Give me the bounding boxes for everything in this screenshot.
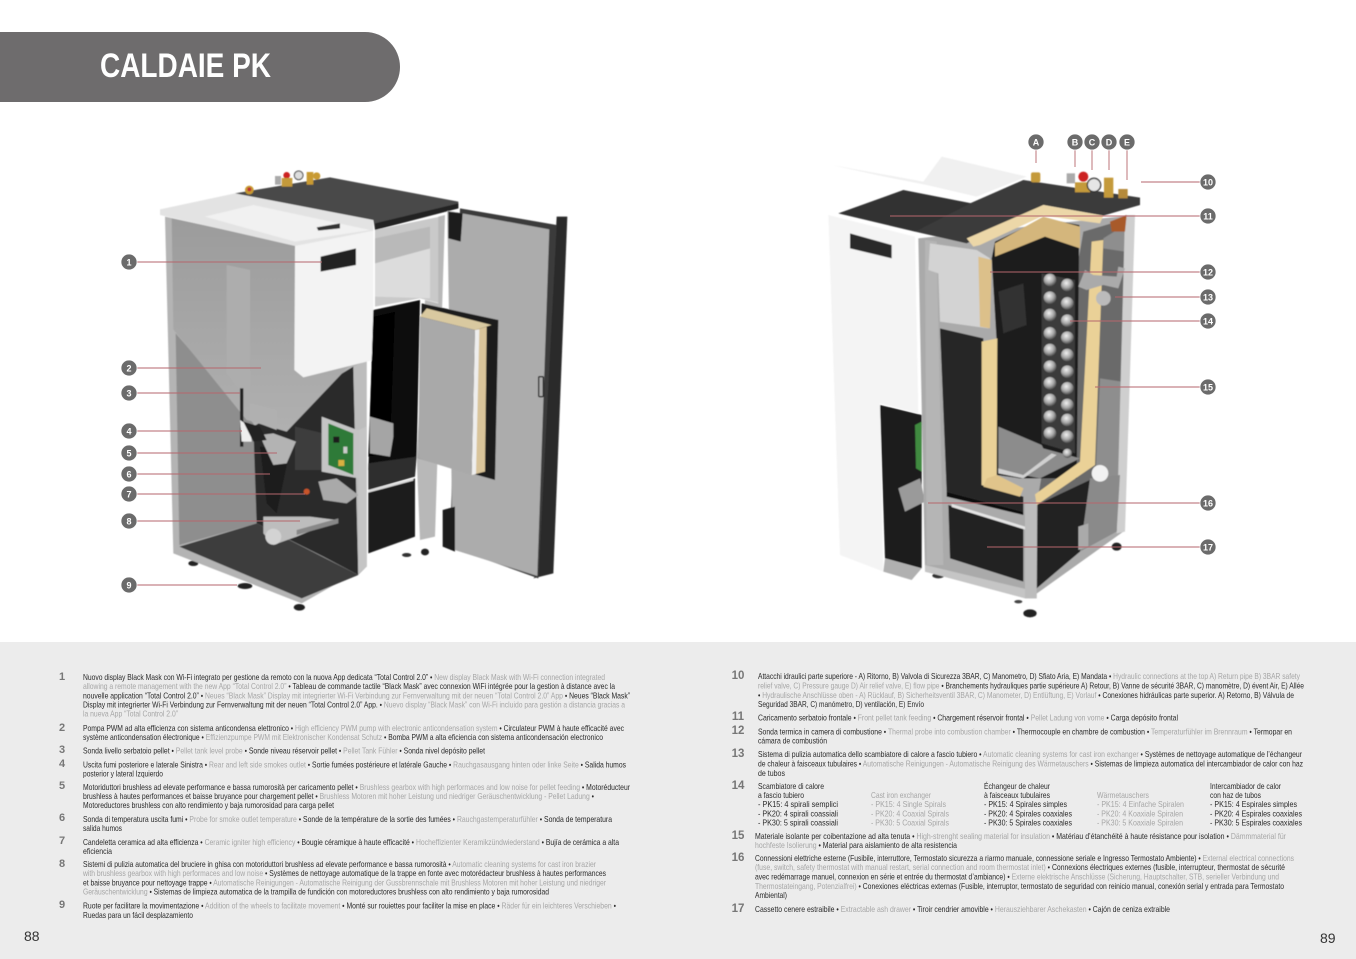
- item 16: Ambiental): [755, 890, 787, 900]
- item 13: de chaleur à faisceaux tubulaires • Automatische Reinigungen - Automatische Reinigung des Wärmetauschers • Sistemas de limpieza automatica del intercambiador de calor con haz: [758, 758, 1303, 768]
- item 8: 8: [59, 858, 65, 870]
- item 16: Connessioni elettriche esterne (Fusibile, interruttore, Termostato sicurezza a riarmo manuale, connessione seriale e Ingresso Termostato Ambiente) • External electrical connections: [755, 853, 1294, 863]
- number badges: exterior boiler: 9: [126, 580, 132, 590]
- item 5: Motoriduttori brushless ad elevate performance e bassa rumorosità per caricamento pellet • Brushless gearbox with high performaces and low noise for pellet feeding • Motoréducteur: [83, 782, 630, 792]
- item 14: - PK15: 4 spirali semplici: [758, 799, 838, 809]
- item 8: Sistemi di pulizia automatica del bruciere in ghisa con motoriduttori brushless ad elevate performance e bassa rumorosità • Automatic cleaning systems for cast iron brazier: [83, 859, 596, 869]
- item 5: brushless à hautes performances et baisse bruyance pour chargement pellet • Brushless Motoren mit hoher Leistung und niedriger Geräuschentwicklung - Pellet Ladung •: [83, 791, 594, 801]
- item 8: Geräuschentwicklung • Sistemas de limpieza automatica de la trampilla de fundición con motoreductores brushless con alto rendimiento y baja rumorosidad: [83, 886, 549, 896]
- illustration: boiler exterior with open door: [160, 171, 567, 611]
- item 14: - PK15: 4 Espirales simples: [1210, 799, 1297, 809]
- item 6: salida humos: [83, 823, 122, 833]
- door: [533, 217, 567, 578]
- number badges: exterior boiler: 7: [126, 490, 132, 500]
- item 8: [59, 858, 606, 896]
- number badges: exterior boiler: 8: [126, 516, 132, 526]
- item 14: [732, 780, 1302, 828]
- item 14: - PK15: 4 Single Spirals: [871, 799, 946, 809]
- item 3: 3: [59, 744, 65, 756]
- item 10: Seguridad 3BAR, C) manómetro, D) ventilación, E) Envío: [758, 699, 924, 709]
- number badges: cutaway boiler: 14: [1203, 316, 1213, 326]
- item 13: Sistema di pulizia automatica dello scambiatore di calore a fascio tubiero • Automatic cleaning systems for cast iron exchanger • Systèmes de nettoyage automatique de l’échangeur: [758, 749, 1302, 759]
- item 8: with brushless gearbox with high performaces and low noise • Systèmes de nettoyage automatique de la trappe en fonte avec motorédacteur brushless à hautes performances: [82, 868, 606, 878]
- item 5: 5: [59, 780, 65, 792]
- text panel: left legend items 1-9: [59, 671, 630, 920]
- number badges: cutaway boiler: 12: [1203, 268, 1213, 278]
- leader lines: cutaway boiler: [890, 142, 1208, 547]
- item 7: [59, 835, 619, 856]
- page number 89: 89: [1320, 930, 1336, 946]
- item 14: - PK30: 5 Koaxiale Spiralen: [1097, 818, 1183, 828]
- number badges: cutaway boiler: [1028, 134, 1216, 555]
- item 6: Sonda di temperatura uscita fumi • Probe for smoke outlet temperature • Sonde de la température de la sortie des fumées • Rauchgastemperaturfühler • Sonda de temperatura: [83, 814, 612, 824]
- item 14: - PK30: 5 Espirales coaxiales: [1210, 818, 1302, 828]
- item 12: Sonda termica in camera di combustione • Thermal probe into combustion chamber • Thermocouple en chambre de combustion • Temperaturfühler im Brennraum • Termopar en: [758, 726, 1292, 736]
- item 16: 16: [732, 852, 744, 864]
- item 14: Intercambiador de calor: [1210, 781, 1281, 791]
- number badges: cutaway boiler: 11: [1203, 212, 1213, 222]
- item 5: Motoreductores brushless con alto rendimiento y baja rumorosidad para carga pellet: [83, 800, 335, 810]
- item 1: allowing a remote management with the new App “Total Control 2.0” • Tableau de commande tactile “Black Mask” avec connexion WiFi intégrée pour la gestion à distance avec la: [83, 681, 615, 691]
- number badges: exterior boiler: 6: [126, 470, 132, 480]
- item 13: [732, 748, 1303, 778]
- item 16: (fuse, switch, safety thermostat with manual restart, serial connection and room thermostat inlet) • Connexions électriques externes (fusible, interrupteur, thermostat de sécurité: [755, 862, 1285, 872]
- item 14: Échangeur de chaleur: [984, 781, 1050, 791]
- item 7: eficiencia: [83, 846, 112, 856]
- item 14: à faisceaux tubulaires: [984, 790, 1050, 800]
- item 14: - PK20: 4 Koaxiale Spiralen: [1097, 808, 1183, 818]
- item 14: - PK30: 5 Coaxial Spirals: [871, 818, 949, 828]
- item 14: Cast iron exchanger: [871, 790, 931, 800]
- number badges: cutaway boiler: E: [1124, 138, 1130, 148]
- item 4: posterior y lateral Izquierdo: [83, 768, 163, 778]
- item 12: [732, 725, 1292, 746]
- item 15: Materiale isolante per coibentazione ad alta tenuta • High-strenght sealing material for insulation • Matériau d’étanchéité à haute résistance pour isolation • Dämmmaterial für: [755, 831, 1286, 841]
- item 5: [59, 780, 630, 810]
- item 1: 1: [59, 671, 65, 683]
- clean mechanism: [1078, 267, 1125, 290]
- item 9: 9: [59, 899, 65, 911]
- item 1: nouvelle application “Total Control 2.0” • Neues “Black Mask” Display mit integrierter Wi-Fi Verbindung zur Fernverwaltung mit der neuen “Total Control 2.0” App • Neues “Black Mask”: [83, 690, 630, 700]
- item 14: - PK30: 5 Spirales coaxiales: [984, 818, 1072, 828]
- item 12: 12: [732, 725, 744, 737]
- item 15: 15: [732, 830, 745, 842]
- item 9: Ruedas para un fácil desplazamiento: [83, 910, 193, 920]
- item 7: 7: [59, 835, 65, 847]
- number badges: cutaway boiler: A: [1033, 138, 1040, 148]
- fittings: [1031, 172, 1040, 182]
- number badges: cutaway boiler: 17: [1203, 542, 1213, 552]
- item 11: 11: [732, 711, 745, 723]
- item 2: [59, 722, 624, 742]
- item 10: [732, 670, 1304, 709]
- top fittings: [245, 186, 254, 194]
- number badges: exterior boiler: [121, 254, 137, 593]
- item 15: [732, 830, 1286, 850]
- inner door: [418, 303, 498, 480]
- title banner: CALDAIE PK: [100, 47, 271, 85]
- item 14: - PK20: 4 Spirales coaxiales: [984, 808, 1072, 818]
- item 13: 13: [732, 748, 744, 760]
- number badges: exterior boiler: 4: [126, 426, 132, 436]
- item 14: - PK15: 4 Einfache Spiralen: [1097, 799, 1184, 809]
- item 12: cámara de combustión: [758, 736, 827, 746]
- item 14: 14: [732, 780, 745, 792]
- item 11: Caricamento serbatoio frontale • Front pellet tank feeding • Chargement réservoir frontal • Pellet Ladung von vorne • Carga depósito frontal: [758, 712, 1178, 722]
- item 14: - PK20: 4 spirali coassiali: [758, 808, 838, 818]
- page number 88: 88: [24, 928, 40, 944]
- number badges: cutaway boiler: 16: [1203, 498, 1213, 508]
- item 14: - PK20: 4 Espirales coaxiales: [1210, 808, 1302, 818]
- item 14: - PK20: 4 Coaxial Spirals: [871, 808, 949, 818]
- leader lines: exterior boiler: [129, 262, 322, 585]
- item 6: [59, 812, 612, 833]
- item 10: • Hydraulische Anschlüsse oben - A) Rücklauf, B) Sicherheitsventil 3BAR, C) Manometer, D) Entlüftung, E) Vorlauf • Conexiones hidráulicas parte superior. A) Retorno, B) Válvula de: [758, 690, 1294, 700]
- item 2: Pompa PWM ad alta efficienza con sistema anticondensa elettronico • High efficiency PWM pump with electronic anticondensation system • Circulateur PWM à haute efficacité avec: [83, 723, 624, 733]
- item 7: Candeletta ceramica ad alta efficienza • Ceramic igniter high efficiency • Bougie céramique à haute efficacité • Hocheffizienter Keramikzündwiederstand • Bujía de cerámica a alta: [83, 837, 619, 847]
- tubes: [1044, 274, 1074, 458]
- number badges: cutaway boiler: D: [1106, 138, 1113, 148]
- item 14: - PK30: 5 spirali coassiali: [758, 818, 838, 828]
- number badges: cutaway boiler: 15: [1203, 382, 1213, 392]
- item 17: Cassetto cenere estraibile • Extractable ash drawer • Tiroir cendrier amovible • Herausziehbarer Aschekasten • Cajón de ceniza extraible: [755, 904, 1170, 914]
- item 1: la nueva App “Total Control 2.0”: [83, 708, 178, 718]
- item 10: 10: [732, 670, 744, 682]
- illustration: boiler cutaway section: [828, 157, 1140, 617]
- item 10: Attacchi idraulici parte superiore - A) Ritorno, B) Valvola di Sicurezza 3BAR, C) Manometro, D) Sfiato Aria, E) Mandata • Hydraulic connections at the top A) Return pipe B) 3BAR safety: [758, 671, 1301, 681]
- item 3: Sonda livello serbatoio pellet • Pellet tank level probe • Sonde niveau réservoir pellet • Pellet Tank Fühler • Sonda nivel depósito pellet: [83, 746, 486, 756]
- number badges: exterior boiler: 3: [126, 388, 132, 398]
- item 8: et baisse bruyance pour nettoyage trappe • Automatische Reinigungen - Automatische Reinigung der Gussbrennschale mit Brushless Motoren mit hoher Leistung und niedriger: [83, 878, 606, 888]
- item 14: Scambiatore di calore: [758, 781, 824, 791]
- number badges: cutaway boiler: 10: [1203, 178, 1213, 188]
- text panel: right legend items 10-17: [732, 670, 1304, 915]
- item 9: Ruote per facilitare la movimentazione • Addition of the wheels to facilitate movement • Monté sur rouiettes pour faciliter la mise en place • Räder für ein leichteres Verschieben •: [83, 900, 616, 910]
- number badges: exterior boiler: 5: [126, 448, 132, 458]
- item 15: hochfeste Isolierung • Material para aislamiento de alta resistencia: [755, 840, 957, 850]
- number badges: exterior boiler: 2: [126, 364, 132, 374]
- item 1: Nuovo display Black Mask con Wi-Fi integrato per gestione da remoto con la nuova App dedicata “Total Control 2.0” • New display Black Mask with Wi-Fi connection integrated: [83, 672, 605, 682]
- item 16: [732, 852, 1294, 900]
- item 13: de tubos: [758, 768, 785, 778]
- item 17: 17: [732, 903, 744, 915]
- item 1: Display mit integrierter Wi-Fi Verbindung zur Fernverwaltung mit der neuen “Total Control 2.0” App. • Nuevo display “Black Mask” con Wi-Fi incluido para gestión a distancia gracias a: [83, 700, 625, 710]
- item 6: 6: [59, 812, 65, 824]
- number badges: exterior boiler: 1: [126, 258, 132, 268]
- item 4: 4: [59, 758, 66, 770]
- item 4: Uscita fumi posteriore e laterale Sinistra • Rear and left side smokes outlet • Sortie fumées postérieure et latérale Gauche • Rauchgasausgang hinten oder linke Seite • Salida humos: [83, 760, 626, 770]
- item 14: a fascio tubiero: [758, 790, 804, 800]
- number badges: cutaway boiler: B: [1072, 138, 1079, 148]
- item 16: avec redémarrage manuel, connexion en série et entrée du thermostat d’ambiance) • Externe elektrische Anschlüsse (Sicherung, Hauptschalter, STB, serieller Verbindung und: [755, 872, 1279, 882]
- item 4: [59, 758, 626, 778]
- background: grey text band: [0, 642, 1356, 959]
- item 1: [59, 671, 630, 718]
- item 14: con haz de tubos: [1210, 790, 1261, 800]
- item 14: - PK15: 4 Spirales simples: [984, 799, 1067, 809]
- number badges: cutaway boiler: C: [1089, 138, 1096, 148]
- item 2: 2: [59, 722, 65, 734]
- item 14: Wärmetauschers: [1097, 790, 1149, 800]
- number badges: cutaway boiler: 13: [1203, 292, 1213, 302]
- item 2: système anticondensation électronique • Effizienzpumpe PWM mit Elektronischer Kondensat Schutz • Bomba PWM a alta eficiencia con sistema anticondensación electronico: [83, 732, 603, 742]
- title banner: [0, 32, 400, 102]
- item 9: [59, 899, 616, 920]
